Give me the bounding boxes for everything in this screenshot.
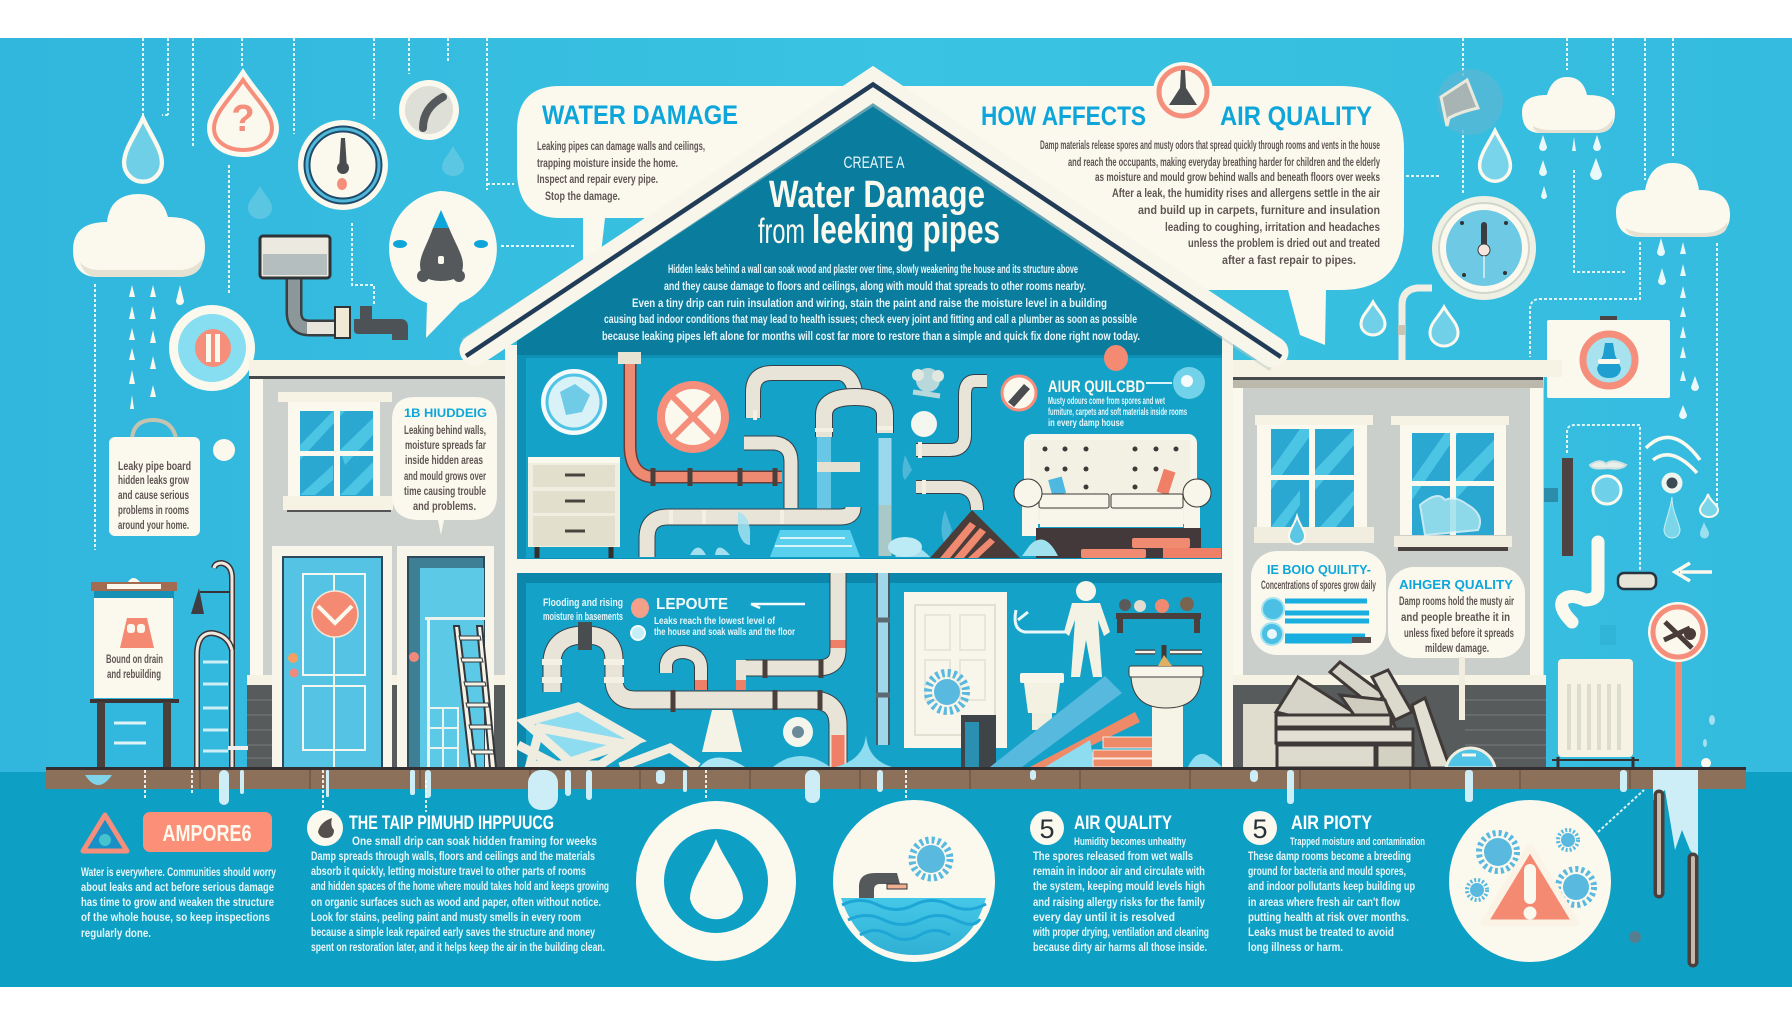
panel: right speech bubble bbox=[885, 62, 1404, 345]
icon: hanging ring tap bbox=[1590, 461, 1626, 504]
panel: hanging note board: around your home. bbox=[118, 518, 189, 532]
icon: no-leak road sign bbox=[1648, 602, 1708, 770]
text block: air quality body: remain in indoor air and circulate with bbox=[1033, 864, 1205, 878]
pipe: coral riser bbox=[630, 360, 782, 486]
callout: air quality progress bubble: Concentrations of spores grow daily bbox=[1261, 578, 1376, 592]
text block: the tap body: and hidden spaces of the home where mould takes hold and keeps growing bbox=[311, 879, 609, 893]
icon: mould badge bbox=[541, 369, 607, 435]
pipes: beige network bbox=[647, 373, 987, 557]
callout: window bubble: time causing trouble bbox=[404, 484, 486, 498]
icon: virus on door bbox=[928, 673, 966, 711]
icon: ladder bbox=[454, 626, 496, 768]
text block: left bubble body: Stop the damage. bbox=[545, 189, 620, 203]
callout: window bubble: 1B HIUDDEIG bbox=[404, 406, 487, 420]
icon: S-bend pipe bbox=[1562, 542, 1598, 622]
illustration: fallen books bbox=[888, 510, 1058, 558]
text block: right bubble body: after a fast repair to pipes. bbox=[1222, 253, 1356, 267]
icon: number five badge two bbox=[1243, 811, 1277, 845]
door: side door with ladder bbox=[397, 546, 496, 770]
text block: upper room note: in every damp house bbox=[1048, 418, 1124, 429]
furniture: drawer cabinet bbox=[528, 457, 620, 558]
text block: lower room note right: Leaks reach the lowest level of bbox=[654, 616, 776, 627]
text block: lower left: about leaks and act before serious damage bbox=[81, 880, 274, 894]
text block: air piety body: in areas where fresh air can't flow bbox=[1248, 895, 1401, 909]
text block: lower room note left: moisture in basements bbox=[543, 611, 623, 623]
callout: window bubble: and mould grows over bbox=[404, 469, 486, 483]
text block: right bubble body: unless the problem is dried out and treated bbox=[1188, 236, 1380, 250]
text block: lower room note right bbox=[654, 616, 795, 638]
text block: the tap body: Look for stains, peeling paint and musty smells in every room bbox=[311, 910, 581, 924]
callout: anger quality bubble: AIHGER QUALITY bbox=[1399, 577, 1513, 592]
text block: lower left bbox=[81, 865, 276, 940]
text block: right bubble body: leading to coughing, irritation and headaches bbox=[1165, 220, 1380, 234]
callout: anger quality bubble: unless fixed before it spreads bbox=[1404, 626, 1514, 640]
text block: the tap body: spent on restoration later, and it helps keep the air in the building clean. bbox=[311, 940, 605, 954]
icon: roof vent pipe bbox=[1398, 288, 1432, 360]
icon: no entry circle bbox=[657, 381, 729, 453]
icon: balloon with valve bbox=[389, 191, 497, 338]
illustration: brick pile bbox=[1093, 737, 1156, 767]
callout: anger quality bubble bbox=[1388, 567, 1525, 720]
icon: pressure gauge bbox=[298, 120, 388, 210]
text block: air piety body: putting health at risk over months. bbox=[1248, 910, 1409, 924]
roof bbox=[466, 84, 1281, 358]
icon: coral question drop bbox=[207, 68, 279, 157]
heading: the tap: THE TAIP PIMUHD IHPPUUCG bbox=[349, 813, 554, 834]
door: front door with check bbox=[272, 546, 392, 770]
text block: upper room note: Musty odours come from spores and wet bbox=[1048, 396, 1165, 407]
heading: air quality note: AIUR QUILCBD bbox=[1048, 377, 1145, 396]
text block: air piety body: These damp rooms become a breeding bbox=[1248, 849, 1411, 863]
icon: wall pipe fixture bbox=[260, 236, 408, 340]
text block: right bubble body: After a leak, the humidity rises and allergens settle in the air bbox=[1112, 186, 1380, 200]
text block: right bubble body: as moisture and mould grow behind walls and beneath floors over weeks bbox=[1095, 170, 1380, 184]
text block: left bubble body: trapping moisture inside the home. bbox=[537, 156, 678, 170]
window: right wing window one bbox=[1254, 415, 1374, 544]
text block: the tap body: absorb it quickly, letting moisture travel to other parts of rooms bbox=[311, 864, 586, 878]
icon: flooded pipe circle bbox=[833, 800, 995, 962]
callout: window bubble: inside hidden areas bbox=[405, 453, 483, 467]
text block: left bubble body: Inspect and repair every pipe. bbox=[537, 172, 658, 186]
arrow: bent tap arrow bbox=[1015, 610, 1066, 632]
icon: coral ball bbox=[1104, 345, 1128, 371]
illustration: pedestal leak bbox=[702, 710, 742, 752]
title block: CREATE A bbox=[844, 153, 905, 172]
panel: hanging note board bbox=[109, 420, 200, 536]
icon: water ball by rubble bbox=[1446, 748, 1495, 768]
text block: air quality body: because dirty air harms all those inside. bbox=[1033, 940, 1207, 954]
text block: lower left: of the whole house, so keep inspections bbox=[81, 910, 270, 924]
icon: drops by vent bbox=[1361, 302, 1458, 346]
text block: lower left: has time to grow and weaken the structure bbox=[81, 895, 274, 909]
callout: window bubble bbox=[392, 397, 497, 535]
icon: plunger badge bbox=[1153, 62, 1213, 122]
title block: from bbox=[758, 212, 805, 251]
text block: attic intro: Even a tiny drip can ruin insulation and wiring, stain the paint and raise the moisture level in a building bbox=[632, 296, 1107, 310]
text block: right bubble body: and build up in carpets, furniture and insulation bbox=[1138, 203, 1380, 217]
text block: the tap body: on organic surfaces such as wood and paper, often without notice. bbox=[311, 895, 601, 909]
text block: air quality body: every day until it is resolved bbox=[1033, 910, 1175, 924]
text block: the tap body: Damp spreads through walls, floors and ceilings and the materials bbox=[311, 849, 595, 863]
title block: Water Damage bbox=[769, 174, 985, 216]
panel: hanging note board: Leaky pipe board bbox=[118, 459, 191, 473]
panel: lower room bbox=[517, 573, 1222, 769]
text block: left bubble body: Leaking pipes can damage walls and ceilings, bbox=[537, 139, 705, 153]
text block: air piety body: long illness or harm. bbox=[1248, 940, 1343, 954]
text block: air quality body: and raising allergy risks for the family bbox=[1033, 895, 1205, 909]
furniture: sofa bbox=[1014, 434, 1221, 558]
text block: lower left: regularly done. bbox=[81, 926, 151, 940]
callout: anger quality bubble: and people breathe it in bbox=[1401, 610, 1510, 624]
panel: easel sign: Bound on drain bbox=[106, 652, 163, 666]
callout: air quality progress bubble bbox=[1251, 551, 1386, 655]
panel: hanging note board: and cause serious bbox=[118, 488, 189, 502]
icon: big water drop circle bbox=[636, 801, 796, 961]
icon: radiator bbox=[1552, 659, 1639, 768]
furniture: interior door bbox=[904, 592, 1007, 748]
icon: wall clock bbox=[1432, 196, 1536, 300]
icon: wrench cluster bbox=[912, 368, 944, 396]
illustration: collapsed rubble bbox=[1276, 662, 1450, 768]
icon: lamp post and rail bbox=[191, 563, 248, 770]
title block: leeking pipes bbox=[812, 208, 1000, 252]
panel: left wing of house bbox=[247, 360, 507, 770]
heading: air piety: AIR PIOTY bbox=[1291, 813, 1372, 834]
panel: easel sign: and rebuilding bbox=[107, 667, 161, 681]
text block: air quality body bbox=[1032, 836, 1209, 954]
water: pooling leak bbox=[690, 455, 952, 557]
illustration: collapsed frames bbox=[518, 707, 698, 767]
arrow: left arrow bbox=[1675, 563, 1712, 581]
panel: hanging note board: hidden leaks grow bbox=[118, 473, 189, 487]
icon: white ball bbox=[911, 411, 937, 437]
callout: anger quality bubble: Damp rooms hold the musty air bbox=[1399, 594, 1514, 608]
text block: air quality body: the system, keeping mould levels high bbox=[1033, 879, 1205, 893]
icon: grey pipe circle bbox=[399, 80, 459, 140]
callout: window bubble: moisture spreads far bbox=[405, 438, 486, 452]
ground beam with drips bbox=[46, 767, 1746, 860]
callout: anger quality bubble: mildew damage. bbox=[1425, 641, 1489, 655]
icon: air bubble with connector bbox=[1146, 367, 1205, 399]
text block: lower room note right: the house and soak walls and the floor bbox=[654, 627, 795, 638]
pipes: lower network bbox=[542, 573, 890, 767]
panel: left speech bubble bbox=[517, 86, 865, 275]
icon: right cloud two bbox=[1616, 163, 1730, 419]
icon: coral dot and ring bbox=[631, 598, 649, 640]
text block: upper room note: furniture, carpets and soft materials inside rooms bbox=[1048, 407, 1187, 418]
arrow: lower room pointer bbox=[751, 604, 805, 608]
text block: left bubble body bbox=[537, 139, 705, 203]
callout: window bubble: and problems. bbox=[413, 499, 476, 513]
text block: upper room note bbox=[1048, 396, 1187, 429]
window bbox=[278, 392, 393, 512]
panel: hanging note board: problems in rooms bbox=[118, 503, 189, 517]
heading: air quality: AIR QUALITY bbox=[1220, 101, 1372, 131]
icon: dripping stems bbox=[1629, 795, 1693, 962]
text block: lower room note left bbox=[543, 597, 623, 623]
callout: air quality progress bubble: IE BOIO QUILITY- bbox=[1267, 562, 1371, 577]
window: right wing window two bbox=[1391, 416, 1512, 551]
icon: warning triangle bbox=[83, 815, 127, 851]
text block: air quality body: with proper drying, ventilation and cleaning bbox=[1032, 925, 1209, 939]
icon: coral pipe badge bbox=[1002, 376, 1036, 410]
text block: air piety body: Trapped moisture and contamination bbox=[1290, 836, 1425, 848]
heading: how affects: HOW AFFECTS bbox=[981, 101, 1146, 131]
text block: attic intro: and they cause damage to floors and ceilings, along with mould that spreads to other rooms nearby. bbox=[664, 279, 1086, 293]
panel: wall sign with flask bbox=[1547, 316, 1670, 398]
text block: the tap body: One small drip can soak hidden framing for weeks bbox=[352, 834, 597, 848]
text block: right bubble body: Damp materials release spores and musty odors that spread quickly through rooms and vents in the house bbox=[1040, 138, 1380, 152]
text block: air quality body: Humidity becomes unhealthy bbox=[1074, 836, 1187, 848]
panel: right wing of house bbox=[1233, 360, 1562, 772]
text block: the tap body bbox=[311, 834, 609, 954]
furniture: toilet bbox=[1020, 673, 1064, 730]
icon: faint drops bbox=[248, 146, 464, 219]
button: amporeg label: AMPORE6 bbox=[162, 820, 252, 846]
text block: air piety body: ground for bacteria and mould spores, bbox=[1248, 864, 1406, 878]
text block: lower room note left: Flooding and rising bbox=[543, 597, 623, 609]
text block: the tap body: because a simple leak repaired early saves the structure and money bbox=[311, 925, 595, 939]
title block bbox=[758, 153, 1000, 252]
icon: tap badge bbox=[307, 810, 343, 846]
icon: left cloud with rain bbox=[73, 194, 205, 409]
furniture: bathroom shelf bbox=[1116, 597, 1201, 633]
heading: lepoute: LEPOUTE bbox=[656, 596, 728, 613]
text block: air piety body: Leaks must be treated to avoid bbox=[1248, 925, 1394, 939]
text block: air piety body bbox=[1248, 836, 1425, 954]
icon: number five badge two: 5 bbox=[1252, 814, 1268, 844]
icon: number five badge: 5 bbox=[1039, 814, 1055, 844]
icon: dark wall bar bbox=[1544, 458, 1573, 556]
icon: capsule valve bbox=[1618, 573, 1656, 589]
icon: pause circle bbox=[169, 305, 255, 391]
icon: dark doorway box bbox=[961, 715, 996, 768]
text block: attic intro: causing bad indoor conditions that may lead to health issues; check every joint and fitting and call a plumber as soon as possible bbox=[604, 312, 1137, 326]
furniture: pedestal sink bbox=[1129, 645, 1222, 768]
icon: wifi drip sensor bbox=[1646, 437, 1718, 538]
icon: grey flag bbox=[1437, 69, 1503, 135]
icon: upper right drop bbox=[1480, 131, 1510, 181]
icon: number five badge bbox=[1030, 811, 1064, 845]
text block: lower left: Water is everywhere. Communities should worry bbox=[81, 865, 276, 879]
icon: small pale drops bbox=[1600, 625, 1715, 768]
panel: upper room bbox=[517, 345, 1222, 559]
icon: gear and mound bbox=[700, 717, 892, 767]
icon: coral question drop: ? bbox=[231, 98, 255, 140]
icon: right cloud one bbox=[1522, 77, 1615, 199]
text block: attic intro: Hidden leaks behind a wall can soak wood and plaster over time, slowly weakening the house and its structure above bbox=[668, 262, 1078, 276]
icon: warning with viruses bbox=[1449, 800, 1611, 962]
icon: water drop left bbox=[124, 118, 162, 182]
panel: easel sign bbox=[90, 578, 179, 769]
callout: window bubble: Leaking behind walls, bbox=[404, 423, 486, 437]
text block: air quality body: The spores released from wet walls bbox=[1033, 849, 1193, 863]
floor slab bbox=[517, 559, 1222, 573]
icon: person standing bbox=[1064, 581, 1110, 677]
heading: water damage: WATER DAMAGE bbox=[542, 100, 738, 130]
heading: air quality lower: AIR QUALITY bbox=[1074, 813, 1172, 834]
text block: air piety body: and indoor pollutants keep building up bbox=[1248, 879, 1415, 893]
panel: central house bbox=[466, 84, 1281, 770]
text block: right bubble body: and reach the occupants, making everyday breathing harder for children and the elderly bbox=[1068, 155, 1380, 169]
button: amporeg label bbox=[143, 812, 272, 852]
illustration: leaning boards bbox=[990, 676, 1140, 767]
text block: attic intro: because leaking pipes left alone for months will cost far more to restore than a simple and quick fix done right now today. bbox=[602, 329, 1140, 343]
text block: right bubble body bbox=[1040, 138, 1380, 267]
icon: white dot bbox=[213, 439, 235, 461]
text block: attic intro bbox=[602, 262, 1140, 343]
